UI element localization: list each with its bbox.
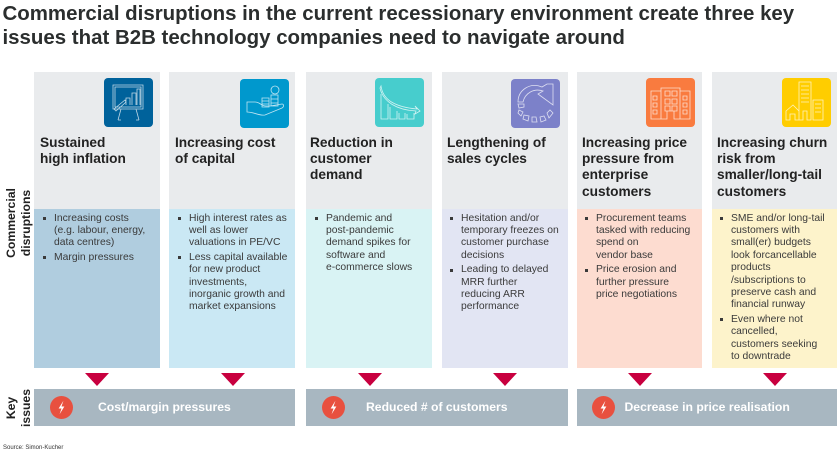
text: churn bullets: cancelled, — [731, 326, 778, 337]
row label: commercial disruptions — [4, 188, 32, 258]
title — [2, 2, 794, 48]
panel: sustained high inflation header — [34, 72, 160, 209]
heading: increasing cost of capital — [175, 135, 276, 166]
text: demand bullets — [315, 212, 412, 273]
text: inflation bullets: (e.g. labour, energy, — [54, 225, 145, 236]
heading: reduction in customer demand: demand — [310, 167, 362, 182]
text: capital bullets — [178, 212, 287, 312]
key issue: reduced # of customers — [306, 389, 568, 426]
key issue: decrease in price realisation: Decrease in price realisation — [624, 400, 790, 414]
arrow: demand down — [358, 373, 382, 386]
panel: increasing churn risk header — [712, 72, 837, 209]
text: capital bullets: inorganic growth and — [189, 289, 285, 300]
row label: key issues: Key — [4, 397, 18, 419]
text: price pressure bullets: spend on — [596, 237, 639, 248]
panel: increasing cost of capital body — [169, 209, 295, 368]
panel: increasing churn risk body — [712, 209, 837, 368]
text: sales cycle bullets: MRR further — [461, 277, 517, 288]
heading: increasing churn risk — [717, 135, 827, 199]
text: inflation bullets: Margin pressures — [54, 252, 134, 263]
text: demand bullets: demand spikes for — [326, 237, 411, 248]
text: capital bullets: investments, — [189, 277, 247, 288]
text: sales cycle bullets: customer purchase — [461, 237, 549, 248]
text: sales cycle bullets: temporary freezes on — [461, 225, 559, 236]
text: capital bullets: market expansions — [189, 301, 276, 312]
text: demand bullets: Pandemic and — [326, 212, 392, 224]
text: price pressure bullets: vendor base — [596, 250, 653, 261]
text: sales cycle bullets: Hesitation and/or — [461, 212, 539, 224]
text: sales cycle bullets — [450, 212, 559, 312]
row label: commercial disruptions: Commercial — [4, 188, 18, 258]
text: sales cycle bullets: performance — [461, 301, 519, 312]
heading: increasing churn risk: risk from — [717, 151, 776, 166]
heading: increasing churn risk: Increasing churn — [717, 135, 827, 150]
row label: key issues: issues — [18, 389, 32, 427]
text: price pressure bullets: Procurement teams — [596, 212, 686, 224]
heading: lengthening of sales cycles: sales cycles — [447, 151, 527, 166]
text: price pressure bullets — [585, 212, 690, 300]
arrow: sales cycles down — [493, 373, 517, 386]
text: capital bullets: High interest rates as — [189, 212, 287, 224]
text: churn bullets: preserve cash and — [731, 287, 816, 298]
heading: increasing price pressure: customers — [582, 184, 651, 199]
panel: increasing price pressure body — [577, 209, 702, 368]
panel: lengthening of sales cycles header — [442, 72, 568, 209]
text: inflation bullets: Increasing costs — [54, 212, 129, 224]
text: inflation bullets: data centres) — [54, 237, 114, 248]
heading: increasing churn risk: customers — [717, 184, 786, 199]
text: capital bullets: well as lower — [189, 225, 248, 236]
key issue: decrease in price realisation — [577, 389, 837, 426]
text: capital bullets: for new product — [189, 264, 260, 275]
text: price pressure bullets: Price erosion and — [596, 264, 676, 275]
text: churn bullets: SME and/or long-tail — [731, 212, 825, 224]
heading: increasing price pressure: pressure from — [582, 151, 674, 166]
panel: increasing cost of capital header — [169, 72, 295, 209]
panel: increasing price pressure header — [577, 72, 702, 209]
text: sales cycle bullets: decisions — [461, 250, 504, 261]
icon: city skyline — [782, 78, 831, 127]
icon: declining chart — [375, 78, 424, 127]
icon: office buildings — [646, 78, 695, 127]
heading: sustained high inflation: high inflation — [40, 151, 126, 166]
panel: lengthening of sales cycles body — [442, 209, 568, 368]
text: churn bullets: look forcancellable — [731, 250, 817, 261]
text: churn bullets: financial runway — [731, 299, 805, 310]
text: price pressure bullets: further pressure — [596, 277, 669, 288]
heading: sustained high inflation: Sustained — [40, 135, 105, 150]
heading: increasing price pressure: Increasing price — [582, 135, 687, 150]
heading: increasing churn risk: smaller/long-tail — [717, 167, 822, 182]
text: churn bullets: customers seeking — [731, 339, 817, 350]
heading: lengthening of sales cycles — [447, 135, 546, 166]
text: price pressure bullets: price negotiations — [596, 289, 677, 300]
row label: commercial disruptions: disruptions — [18, 190, 32, 256]
heading: reduction in customer demand: customer — [310, 151, 372, 166]
icon: presentation board — [104, 78, 153, 127]
arrow: price pressure down — [628, 373, 652, 386]
text: demand bullets: post-pandemic — [326, 225, 394, 236]
heading: increasing cost of capital: of capital — [175, 151, 235, 166]
heading: increasing price pressure — [582, 135, 687, 199]
text: price pressure bullets: tasked with reducing — [596, 225, 690, 236]
panel: sustained high inflation body — [34, 209, 160, 368]
arrow: capital down — [221, 373, 245, 386]
key issue: cost/margin pressures — [34, 389, 295, 426]
icon: hand with coins — [240, 79, 289, 128]
text: sales cycle bullets: reducing ARR — [461, 289, 525, 300]
text: sales cycle bullets: Leading to delayed — [461, 264, 548, 275]
panel: reduction in customer demand body — [306, 209, 432, 368]
title: issues that B2B technology companies need to navigate around — [2, 26, 625, 48]
text: demand bullets: software and — [326, 250, 385, 261]
text: churn bullets: /subscriptions to — [731, 275, 806, 286]
text: inflation bullets — [43, 212, 145, 263]
heading: increasing price pressure: enterprise — [582, 167, 648, 182]
heading: sustained high inflation — [40, 135, 126, 166]
text: churn bullets: Even where not — [731, 314, 803, 325]
arrow: churn down — [763, 373, 787, 386]
arrow: inflation down — [85, 373, 109, 386]
icon: circular arrow — [511, 79, 560, 128]
text: churn bullets: products — [731, 262, 771, 273]
heading: increasing cost of capital: Increasing cost — [175, 135, 275, 150]
row label: key issues — [4, 389, 32, 427]
key issue: cost/margin pressures: Cost/margin pressures — [98, 400, 231, 414]
text: churn bullets: customers with — [731, 225, 800, 236]
heading: reduction in customer demand: Reduction in — [310, 135, 393, 150]
heading: lengthening of sales cycles: Lengthening of — [447, 135, 546, 150]
text: churn bullets: small(er) budgets — [731, 237, 811, 248]
key issue: reduced # of customers: Reduced # of customers — [366, 400, 508, 414]
panel: reduction in customer demand header — [306, 72, 432, 209]
text: churn bullets: to downtrade — [731, 351, 791, 362]
heading: reduction in customer demand — [310, 135, 393, 182]
text: demand bullets: e-commerce slows — [326, 262, 412, 273]
text: capital bullets: Less capital available — [189, 252, 287, 263]
text: capital bullets: valuations in PE/VC — [189, 237, 280, 248]
title: Commercial disruptions in the current recessionary environment create three key — [2, 2, 794, 24]
text: churn bullets — [720, 212, 825, 362]
source note: Source: Simon-Kucher — [3, 445, 63, 451]
